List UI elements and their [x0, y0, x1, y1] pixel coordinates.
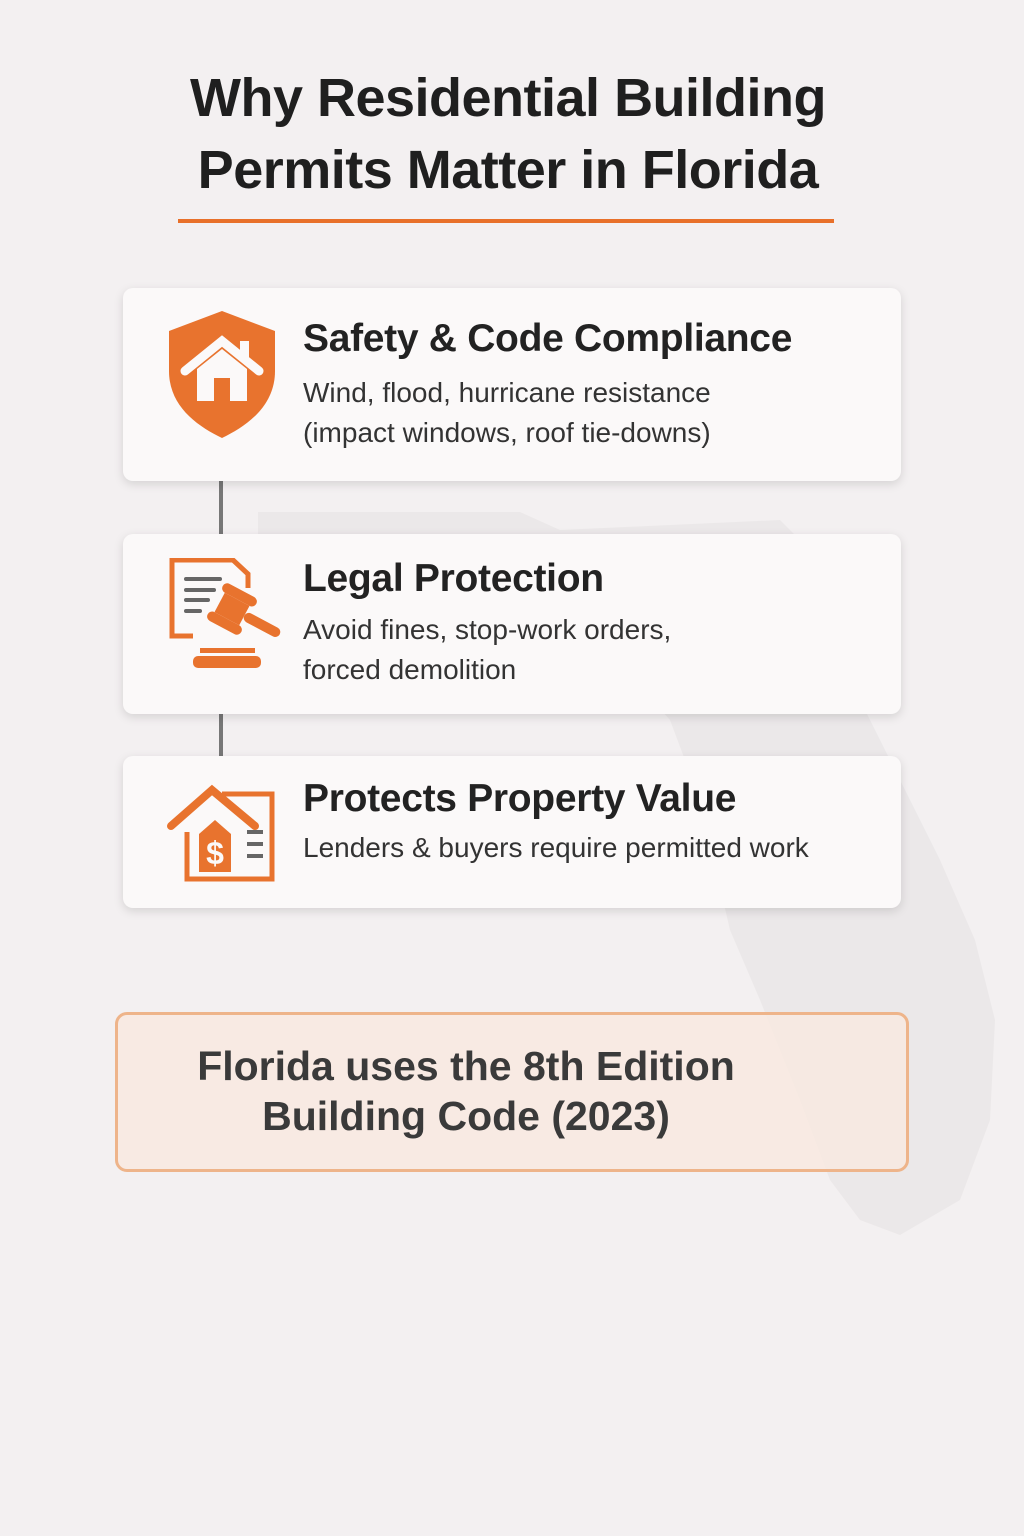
card: safety — [123, 288, 901, 481]
heading: Safety & Code Compliance — [303, 317, 792, 360]
callout: Building Code (2023) — [262, 1093, 670, 1139]
title: Permits Matter in Florida — [198, 140, 818, 200]
icon: shield house — [169, 311, 275, 438]
text: (impact windows, roof tie-downs) — [303, 417, 711, 448]
text: Avoid fines, stop-work orders, — [303, 614, 671, 645]
callout — [115, 1012, 909, 1172]
connector lines — [219, 478, 223, 760]
text — [303, 377, 711, 448]
callout: Florida uses the 8th Edition — [197, 1043, 735, 1089]
title underline — [178, 219, 834, 223]
heading: Protects Property Value — [303, 777, 736, 820]
title — [190, 68, 826, 200]
card: value — [123, 756, 901, 908]
text: Wind, flood, hurricane resistance — [303, 377, 711, 408]
icon: document gavel — [170, 558, 280, 668]
icon: house dollar: $ — [206, 835, 224, 871]
text: forced demolition — [303, 654, 516, 685]
icon: house dollar — [167, 784, 274, 882]
heading: Legal Protection — [303, 557, 604, 600]
title: Why Residential Building — [190, 68, 826, 128]
text: Lenders & buyers require permitted work — [303, 832, 809, 863]
text — [303, 614, 671, 685]
card: legal — [123, 534, 901, 714]
